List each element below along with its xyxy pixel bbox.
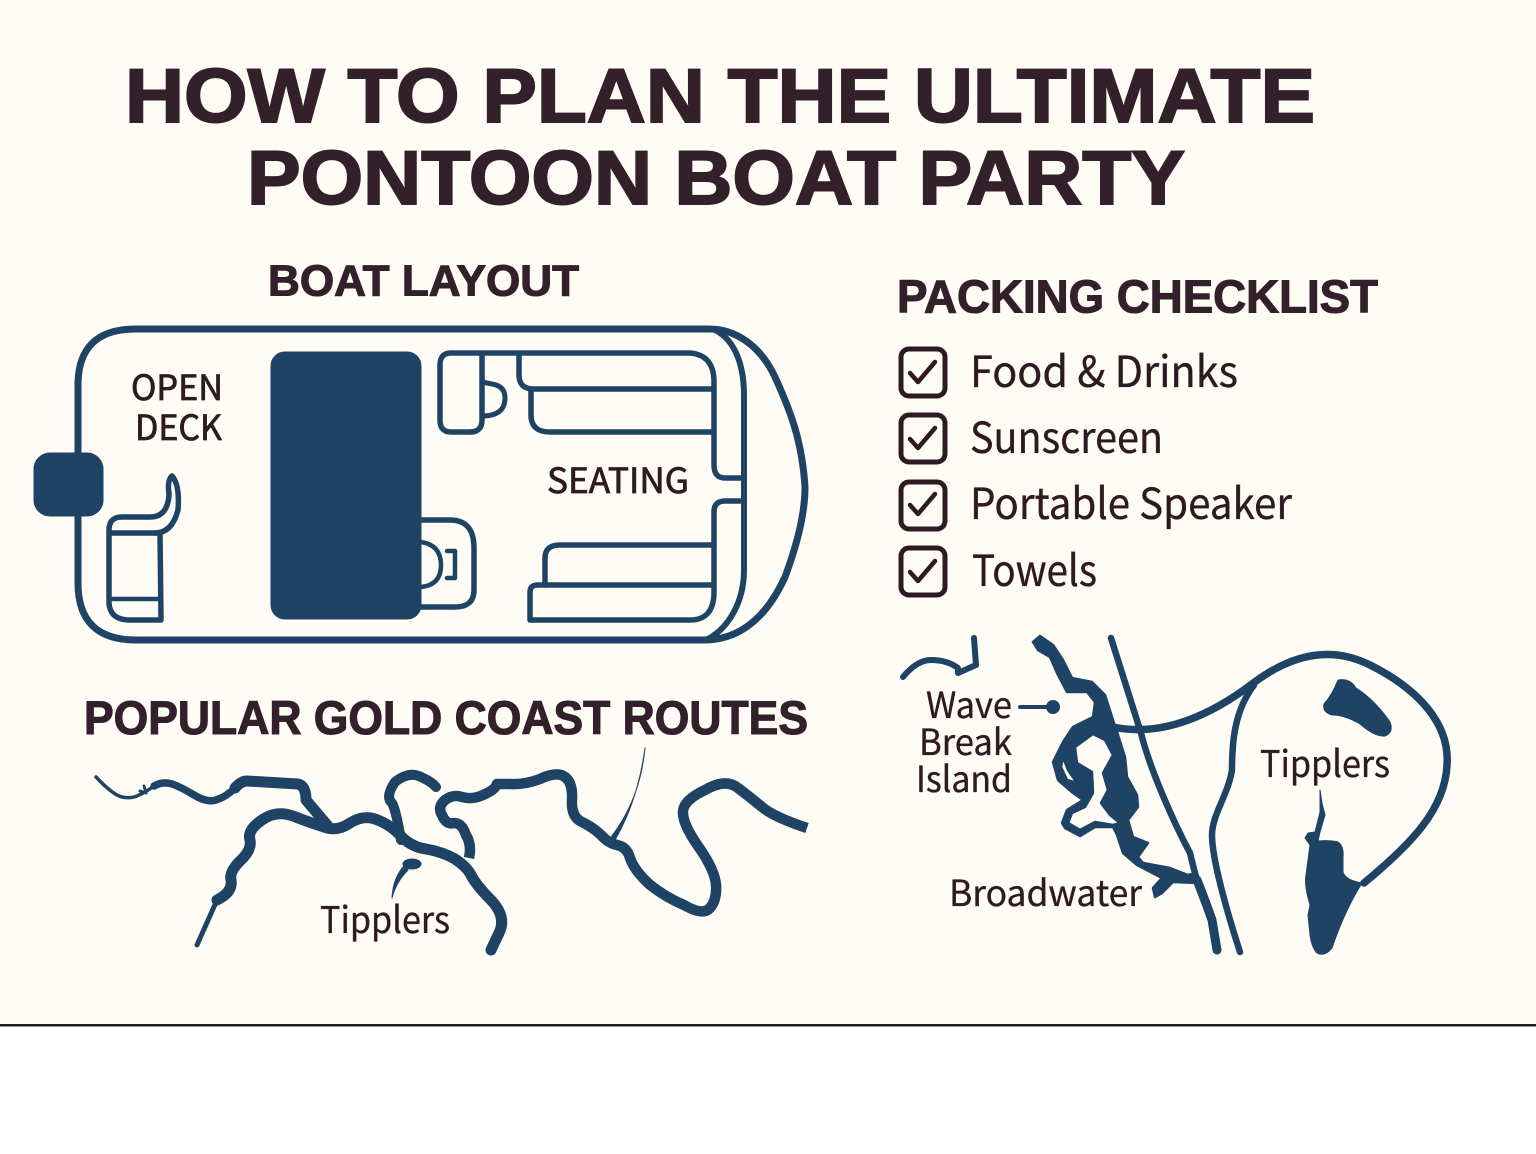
title: HOW TO PLAN THE ULTIMATE — [125, 54, 1315, 139]
title — [125, 54, 1315, 221]
northern squiggle — [903, 638, 976, 677]
wave break pointer — [1020, 700, 1060, 714]
item: food and drinks: Food & Drinks — [970, 338, 1238, 400]
rear helm seat — [109, 476, 178, 620]
bow seating upper — [440, 353, 743, 478]
tipplers loop — [1113, 655, 1447, 883]
item: portable speaker: Portable Speaker — [970, 470, 1292, 532]
central table — [271, 352, 421, 619]
upper channel — [96, 777, 328, 826]
road outer — [1212, 685, 1254, 952]
label: broadwater: Broadwater — [949, 865, 1143, 917]
tipplers pointer — [392, 859, 421, 898]
label: tipplers: Tipplers — [1260, 734, 1390, 788]
item: towels — [901, 537, 1097, 599]
heading: packing checklist: PACKING CHECKLIST — [897, 270, 1378, 322]
heading: boat layout: BOAT LAYOUT — [268, 256, 579, 306]
bow seating lower — [530, 501, 743, 620]
thin tributary — [611, 748, 645, 840]
label: open deck — [131, 360, 223, 451]
road inner — [1111, 638, 1197, 880]
label: seating: SEATING — [547, 453, 689, 504]
transom line — [706, 330, 744, 640]
panel: route map left — [96, 748, 807, 950]
panel: boat layout diagram — [34, 329, 805, 640]
item: sunscreen: Sunscreen — [970, 404, 1163, 466]
panel: route map right — [903, 636, 1447, 954]
item: sunscreen — [901, 404, 1163, 466]
label: tipplers: Tipplers — [320, 890, 450, 944]
label: wave break island: Break — [919, 714, 1012, 766]
lake south — [1305, 790, 1362, 954]
upper loop — [389, 775, 436, 840]
main channel — [197, 814, 502, 950]
label: wave break island: Island — [916, 751, 1012, 803]
label: open deck: OPEN — [131, 360, 223, 411]
motor — [34, 453, 103, 516]
lake north — [1324, 680, 1391, 736]
heading: popular gold coast routes: POPULAR GOLD COAST ROUTES — [84, 691, 808, 744]
eastern channel — [440, 774, 807, 911]
hull outline — [78, 329, 805, 640]
item: towels: Towels — [972, 537, 1097, 599]
label: open deck: DECK — [135, 400, 222, 451]
panel: packing checklist — [901, 338, 1292, 599]
label: wave break island: Wave — [926, 677, 1012, 729]
title: PONTOON BOAT PARTY — [247, 136, 1185, 221]
label: wave break island — [916, 677, 1012, 803]
broadwater channel system — [1033, 636, 1198, 897]
console seat — [421, 520, 474, 607]
